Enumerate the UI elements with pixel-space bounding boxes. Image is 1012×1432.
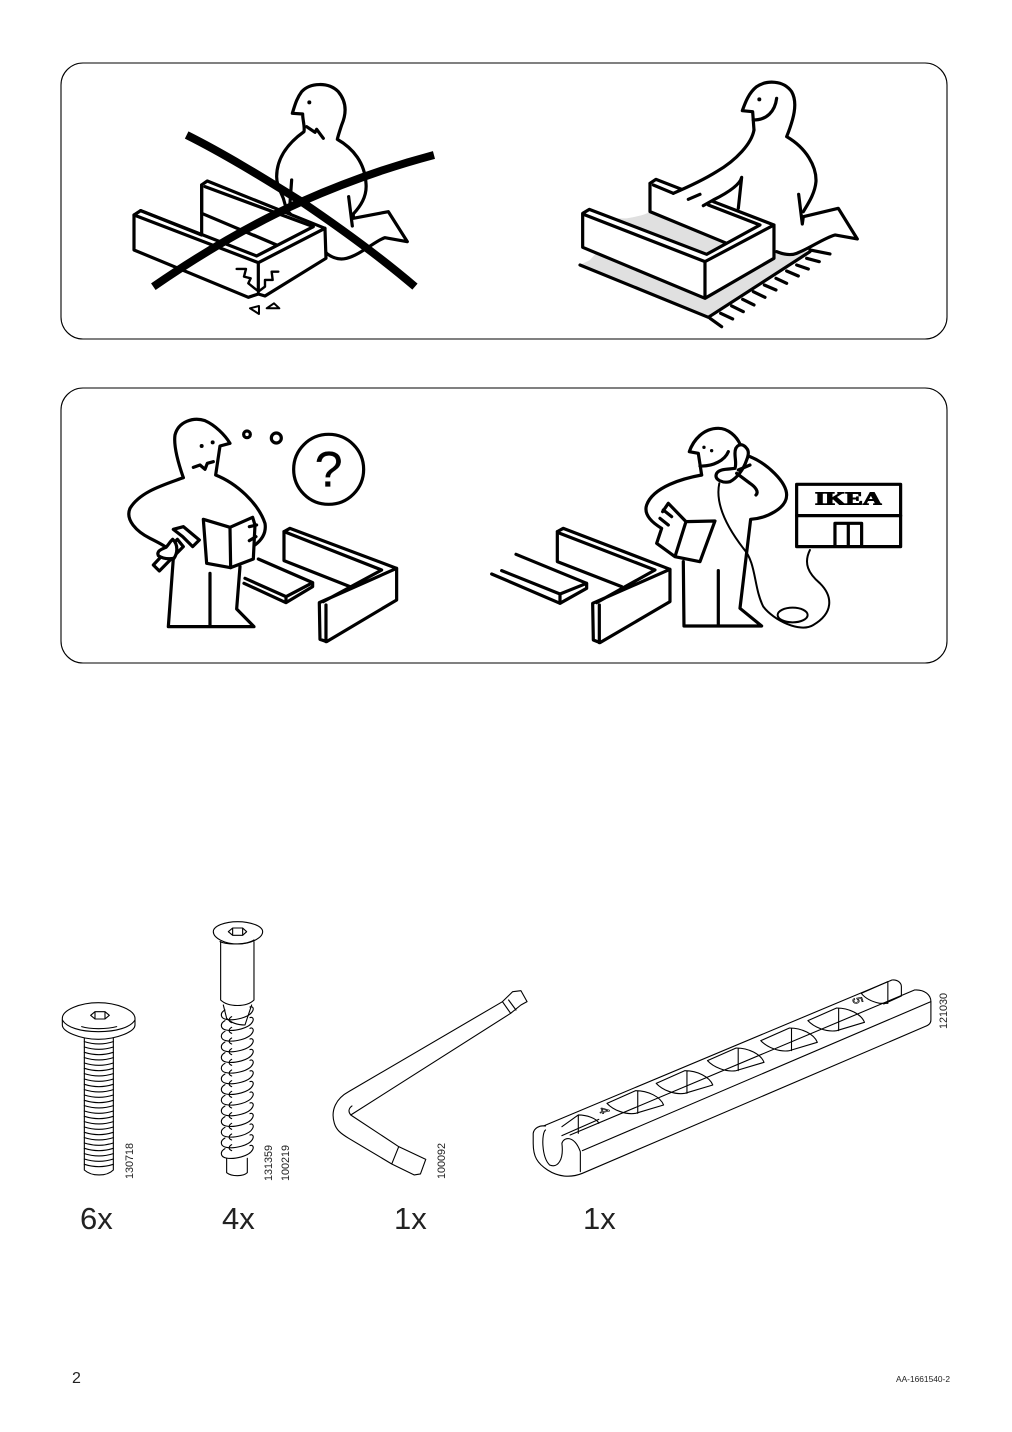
icon: hammer — [153, 527, 199, 571]
document code: AA-1661540-2 — [896, 1374, 950, 1384]
part number: 130718: 130718 — [124, 1143, 136, 1179]
illustration: unhappy person with cracked frame, crossed out — [134, 85, 434, 314]
illustration: happy person phoning IKEA store — [492, 428, 901, 643]
part number: 100219: 100219 — [280, 1145, 292, 1181]
quantity: 6x: 6x — [80, 1201, 113, 1236]
illustration: happy person assembling on a rug — [580, 82, 857, 327]
part: connector tool 121030: 5 — [849, 996, 866, 1005]
icon: telephone handset — [716, 445, 748, 482]
part number: 100092: 100092 — [436, 1143, 448, 1179]
quantity: 4x: 4x — [222, 1201, 255, 1236]
part: bolt 130718 — [62, 1003, 135, 1175]
page number: 2 — [72, 1370, 81, 1387]
quantity: 1x hex key: 1x — [394, 1201, 427, 1236]
icon: question mark in thought bubble: ? — [315, 442, 343, 498]
icon: IKEA store — [797, 484, 901, 547]
icon: IKEA store: IKEA — [815, 489, 882, 509]
part: connector tool 121030: 4 — [596, 1106, 612, 1115]
icon: question mark in thought bubble — [294, 434, 364, 504]
part number: 121030: 121030 — [938, 993, 950, 1029]
part: screw 131359 / 100219 — [213, 922, 263, 1176]
illustration: confused person with hammer and manual — [129, 419, 397, 642]
panel: get help instead of struggling alone — [61, 388, 947, 663]
part: hex key 100092 — [333, 991, 527, 1175]
part: connector tool 121030 — [533, 980, 931, 1176]
panel: do not assemble on a hard floor — [61, 63, 947, 339]
part number: 131359: 131359 — [263, 1145, 275, 1181]
quantity: 1x tool: 1x — [583, 1201, 616, 1236]
